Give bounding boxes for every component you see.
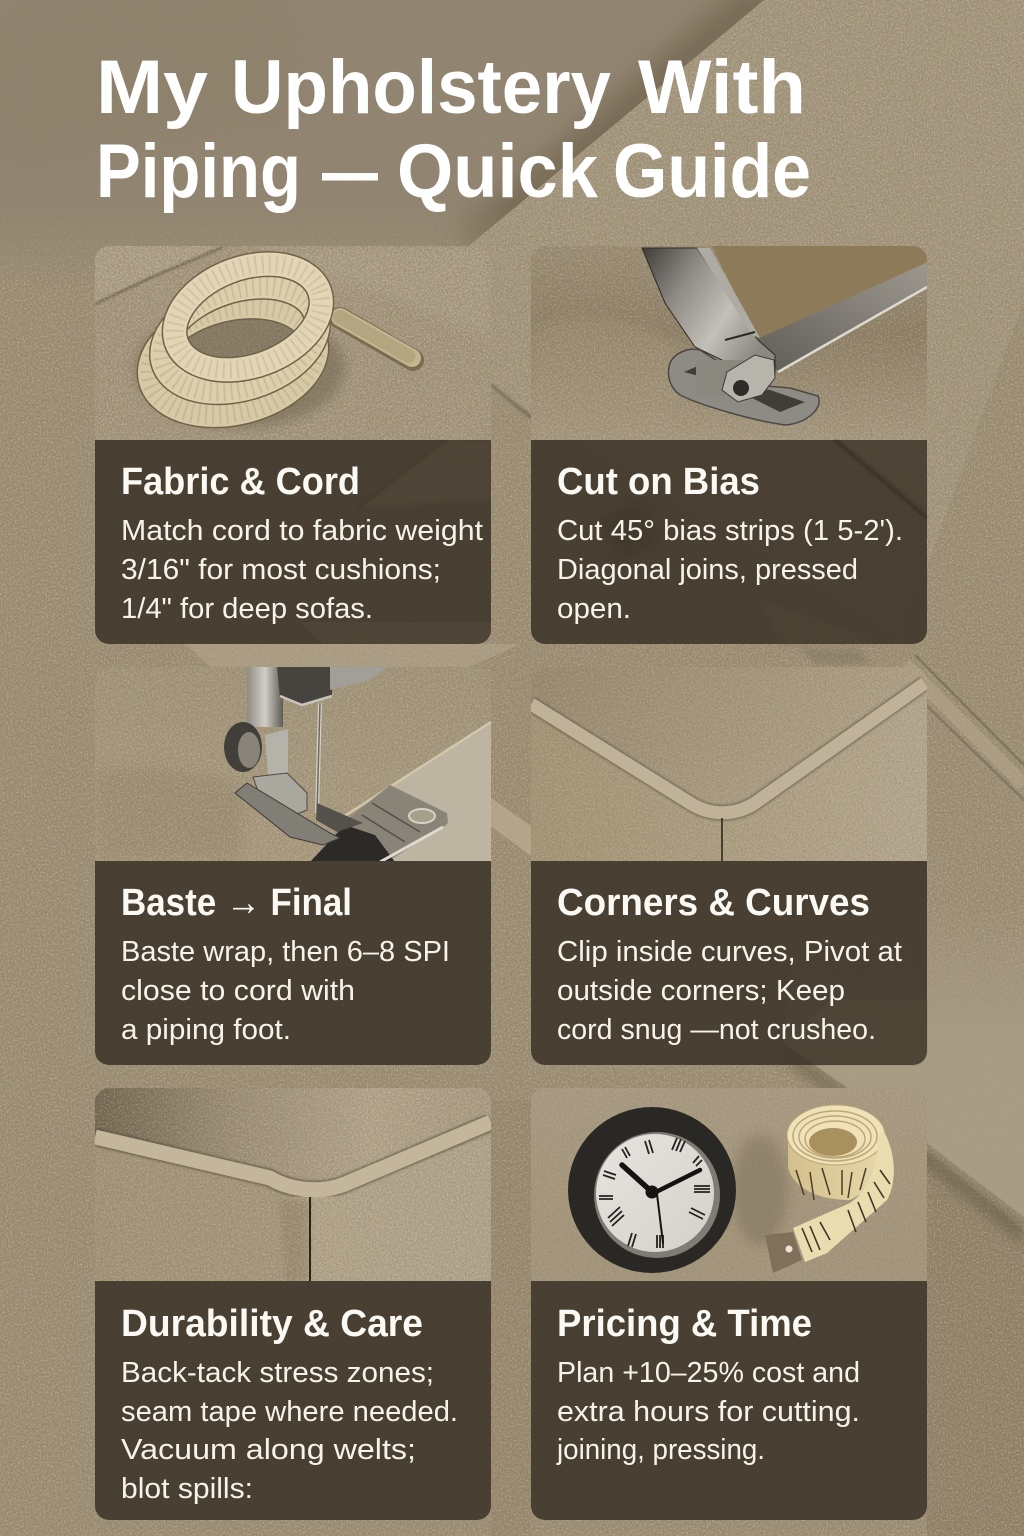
- seam: [309, 1197, 311, 1281]
- body text: seam tape where needed.: [121, 1396, 458, 1428]
- body text: [121, 1357, 458, 1505]
- title: Upholstery: [231, 45, 611, 130]
- body text: [557, 936, 902, 1046]
- title: My: [96, 45, 208, 130]
- soft cushion, lower right: [783, 1043, 1024, 1245]
- panel: Fabric & Cord: [95, 245, 491, 644]
- heading: Pricing & Time: [557, 1303, 812, 1345]
- body text: 3/16" for most cushions;: [121, 554, 441, 586]
- body text: 1/4" for deep sofas.: [121, 593, 373, 625]
- panel: Durability & Care: [95, 1088, 491, 1520]
- body text: a piping foot.: [121, 1014, 291, 1046]
- body text: Back-tack stress zones;: [121, 1357, 434, 1389]
- metal plate: [310, 785, 448, 862]
- seam: [721, 818, 723, 861]
- foot: [668, 349, 819, 425]
- heading: Fabric & Cord: [121, 461, 360, 503]
- panel: Cut on Bias: [531, 246, 927, 644]
- photo: sewing machine foot and plate: [95, 667, 491, 862]
- body text: open.: [557, 593, 631, 625]
- icon: tape measure: [765, 1105, 894, 1273]
- text panel: [531, 1281, 927, 1520]
- body text: Plan +10–25% cost and: [557, 1357, 860, 1389]
- body text: joining, pressing.: [556, 1434, 765, 1466]
- body text: Vacuum along welts;: [121, 1434, 416, 1466]
- body text: Baste wrap, then 6–8 SPI: [121, 936, 450, 968]
- title: Quick: [397, 129, 599, 214]
- text panel: [95, 861, 491, 1065]
- pale table surface: [382, 724, 491, 861]
- photo: stitched corner with welt: [95, 1088, 491, 1281]
- body text: [556, 1357, 860, 1466]
- body text: Match cord to fabric weight: [121, 515, 483, 547]
- text panel: [95, 440, 491, 644]
- cord tail: [340, 317, 413, 360]
- smooth upper-left drape: [0, 0, 764, 270]
- body text: [121, 936, 450, 1046]
- presser foot: [224, 722, 262, 772]
- needle shaft: [247, 667, 283, 727]
- text panel: [531, 861, 927, 1065]
- heading: Corners & Curves: [557, 882, 870, 924]
- heading: Durability & Care: [121, 1303, 423, 1345]
- creases in margins: [491, 385, 532, 418]
- body text: [121, 515, 483, 625]
- heading: Cut on Bias: [557, 461, 760, 503]
- body text: Cut 45° bias strips (1 5-2').: [557, 515, 903, 547]
- body text: cord snug —not crusheo.: [557, 1014, 876, 1046]
- photo: coiled cotton cord on fabric: [95, 245, 491, 440]
- body text: close to cord with: [121, 975, 355, 1007]
- body text: extra hours for cutting.: [557, 1396, 860, 1428]
- title: Piping: [96, 129, 301, 214]
- title: With: [638, 45, 806, 130]
- body text: Clip inside curves, Pivot at: [557, 936, 902, 968]
- body text: outside corners; Keep: [557, 975, 845, 1007]
- body text: blot spills:: [121, 1473, 253, 1505]
- title: [96, 45, 811, 214]
- clock hands: [622, 1165, 700, 1243]
- panel: Corners & Curves: [531, 667, 927, 1065]
- metal strip: [755, 263, 927, 372]
- photo: clock and tape measure: [531, 1088, 927, 1281]
- body text: Diagonal joins, pressed: [557, 554, 858, 586]
- title: Guide: [613, 129, 811, 214]
- clock ticks: [599, 1138, 710, 1248]
- heading: Baste → Final: [121, 882, 352, 924]
- photo: piped cushion corner: [531, 667, 927, 861]
- arm: [642, 248, 775, 373]
- panel: Pricing & Time: [531, 1088, 927, 1520]
- photo: metal presser foot on fabric: [531, 246, 927, 440]
- text panel: [531, 440, 927, 644]
- cord coil: [139, 245, 336, 431]
- text panel: [95, 1281, 491, 1520]
- body text: [557, 515, 903, 625]
- title: —: [322, 129, 378, 214]
- piped band mid right: [915, 655, 1024, 765]
- panel: Baste → Final: [95, 667, 491, 1065]
- icon: clock: [568, 1107, 736, 1273]
